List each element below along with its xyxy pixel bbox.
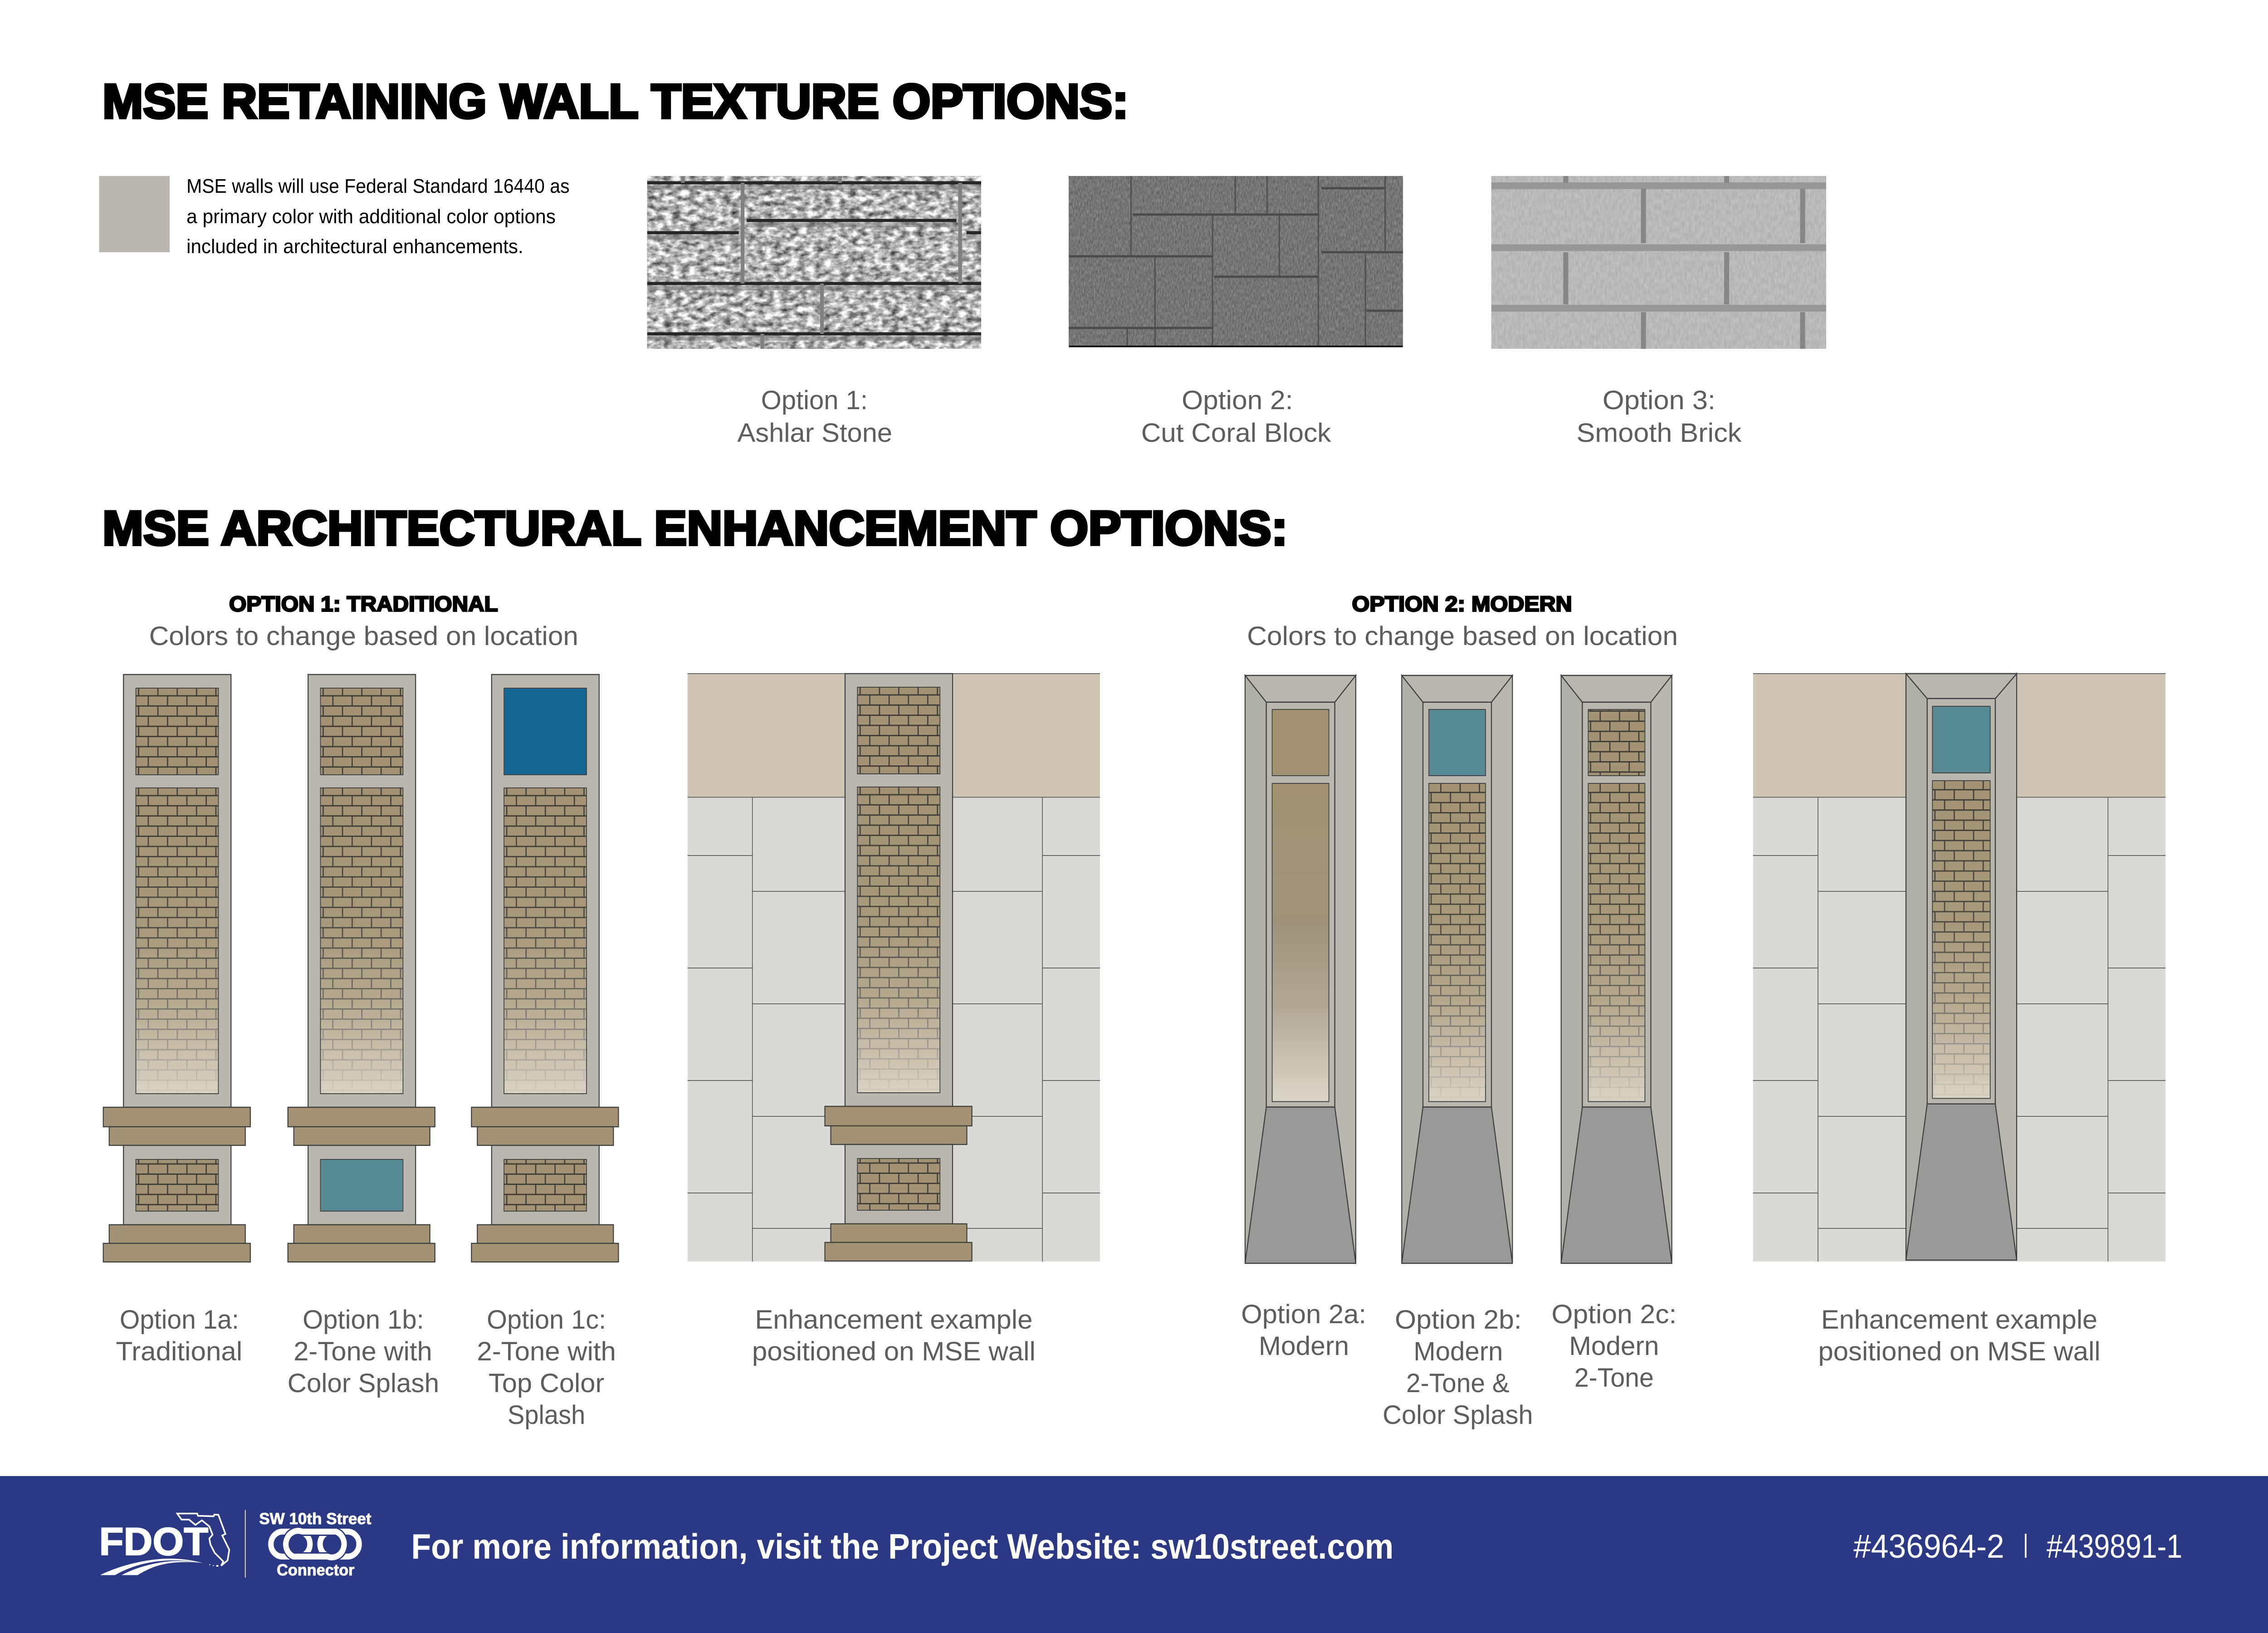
- caption: option 2b: 2-Tone &: [1406, 1368, 1510, 1398]
- caption: traditional enhancement example: Enhancement example: [755, 1305, 1032, 1334]
- subheading: option 2 modern: OPTION 2: MODERN: [1352, 592, 1572, 616]
- caption: option 1c: 2-Tone with: [477, 1336, 616, 1366]
- text block: MSE wall color description: MSE walls will use Federal Standard 16440 as: [186, 175, 570, 197]
- color swatch: Federal Standard 16440: [99, 176, 170, 252]
- caption: option 1b: Color Splash: [288, 1368, 439, 1398]
- subheading: option 1 traditional: OPTION 1: TRADITIONAL: [229, 592, 498, 616]
- caption: traditional enhancement example: positioned on MSE wall: [752, 1336, 1036, 1366]
- pillar: option 1c two-tone with top color splash: [471, 675, 618, 1262]
- caption: option 1a: Traditional: [116, 1336, 242, 1366]
- caption: option 1b: [288, 1305, 439, 1398]
- caption: option 2a: [1241, 1299, 1366, 1360]
- caption: option 1 ashlar stone: [737, 385, 892, 447]
- caption: option 1 ashlar stone: Ashlar Stone: [737, 418, 892, 447]
- text block: MSE wall color description: included in architectural enhancements.: [186, 235, 523, 257]
- caption: modern enhancement example: [1818, 1305, 2101, 1366]
- project numbers: [1853, 1528, 2182, 1565]
- pillar: option 2c modern two-tone: [1561, 675, 1672, 1263]
- caption: option 2c: Modern: [1569, 1331, 1659, 1360]
- FDOT logo: FDOT: [99, 1520, 208, 1564]
- caption: option 2b: [1383, 1305, 1533, 1429]
- caption: option 2b: Option 2b:: [1395, 1305, 1522, 1334]
- caption: option 1b: 2-Tone with: [293, 1336, 432, 1366]
- pillar: option 1a traditional: [103, 675, 250, 1262]
- footer bar: [0, 1476, 2268, 1633]
- caption: option 3 smooth brick: Smooth Brick: [1576, 418, 1742, 447]
- caption: option 3 smooth brick: Option 3:: [1603, 385, 1716, 415]
- text block: MSE wall color description: [186, 175, 570, 257]
- caption: option 2a: Modern: [1259, 1331, 1349, 1360]
- caption: option 1a: [116, 1305, 242, 1366]
- caption: option 2b: Color Splash: [1383, 1400, 1533, 1429]
- pillar: option 2a modern: [1245, 675, 1356, 1263]
- SW 10th Street Connector logo: Connector: [277, 1561, 354, 1579]
- caption: option 2c: Option 2c:: [1551, 1299, 1677, 1329]
- caption: option 1 ashlar stone: Option 1:: [761, 385, 868, 415]
- subheading: option 1 traditional: [149, 592, 578, 650]
- caption: traditional enhancement example: [752, 1305, 1036, 1366]
- pillar: option 2b modern two-tone and color splash: [1402, 675, 1512, 1263]
- caption: option 1c: Splash: [508, 1400, 585, 1429]
- subheading: option 1 traditional: Colors to change based on location: [149, 621, 578, 650]
- SW 10th Street Connector logo: SW 10th Street: [259, 1510, 371, 1528]
- subheading: option 2 modern: [1247, 592, 1678, 650]
- caption: option 1c: Option 1c:: [487, 1305, 606, 1334]
- logo divider: [245, 1510, 246, 1578]
- footer website text: For more information, visit the Project Website: sw10street.com: [411, 1526, 1393, 1566]
- caption: option 2a: Option 2a:: [1241, 1299, 1366, 1329]
- FDOT logo: [99, 1514, 229, 1575]
- caption: option 2 cut coral block: Cut Coral Block: [1141, 418, 1331, 447]
- project numbers: #436964-2: [1853, 1528, 2004, 1565]
- title: MSE retaining wall texture options: MSE RETAINING WALL TEXTURE OPTIONS:: [103, 74, 1129, 128]
- caption: option 3 smooth brick: [1576, 385, 1742, 447]
- wall example: traditional enhancement on MSE wall: [688, 674, 1100, 1261]
- caption: option 1c: Top Color: [489, 1368, 604, 1398]
- caption: option 2 cut coral block: Option 2:: [1182, 385, 1293, 415]
- project numbers: #439891-1: [2047, 1528, 2182, 1565]
- caption: option 2c: 2-Tone: [1574, 1363, 1654, 1392]
- caption: option 2b: Modern: [1413, 1336, 1503, 1366]
- text block: MSE wall color description: a primary color with additional color options: [186, 205, 556, 227]
- caption: option 1c: [477, 1305, 616, 1429]
- texture image: smooth brick: [1491, 176, 1826, 349]
- wall example: modern enhancement on MSE wall: [1753, 674, 2165, 1261]
- caption: modern enhancement example: positioned on MSE wall: [1818, 1336, 2101, 1366]
- SW 10th Street Connector logo: [259, 1510, 371, 1579]
- caption: modern enhancement example: Enhancement example: [1821, 1305, 2097, 1334]
- caption: option 1a: Option 1a:: [120, 1305, 239, 1334]
- caption: option 2c: [1551, 1299, 1677, 1392]
- texture image: ashlar stone: [647, 176, 981, 349]
- pillar: option 1b two-tone with color splash: [288, 675, 435, 1262]
- title: MSE architectural enhancement options: MSE ARCHITECTURAL ENHANCEMENT OPTIONS:: [103, 501, 1288, 555]
- caption: option 2 cut coral block: [1141, 385, 1331, 447]
- texture image: cut coral block: [1069, 176, 1403, 347]
- caption: option 1b: Option 1b:: [303, 1305, 424, 1334]
- subheading: option 2 modern: Colors to change based on location: [1247, 621, 1678, 650]
